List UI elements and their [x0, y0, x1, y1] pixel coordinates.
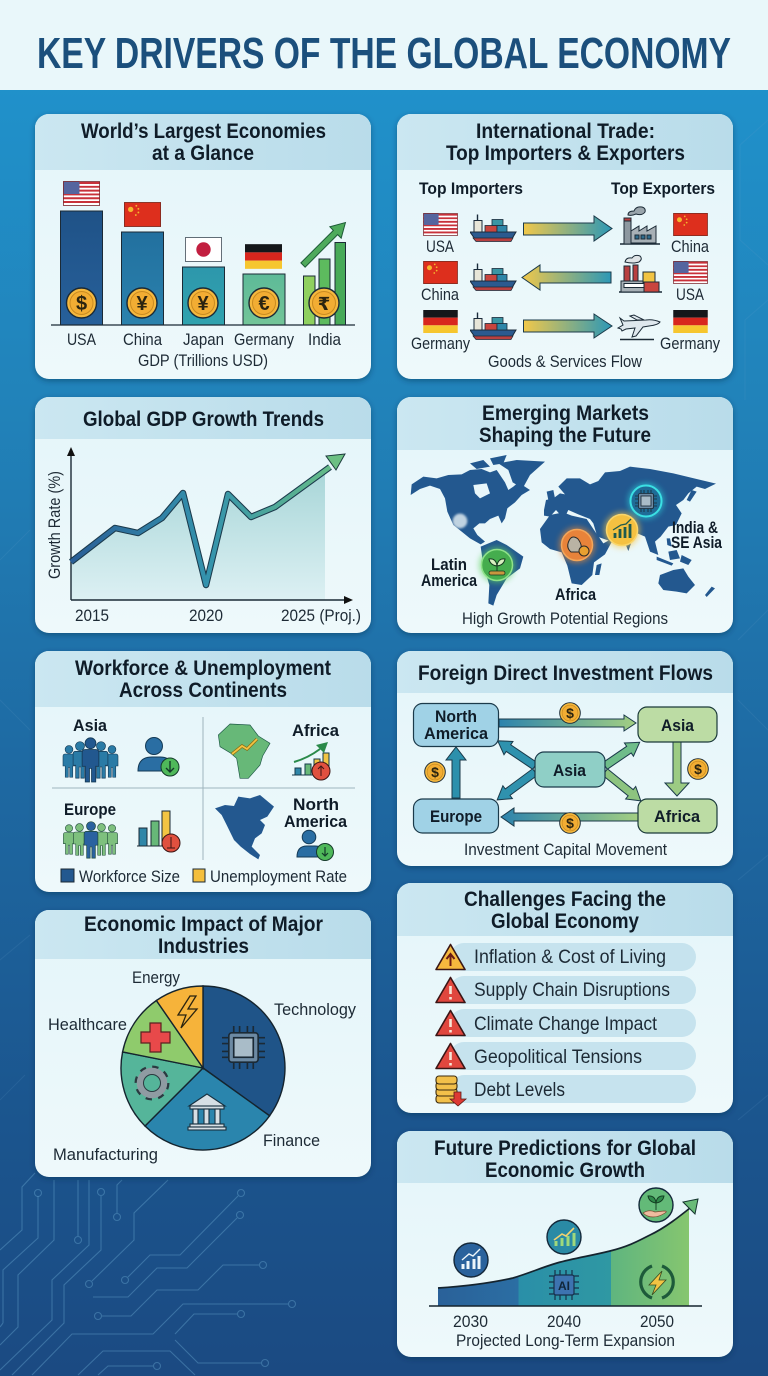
importer flags and labels: USA	[426, 237, 455, 256]
item: inflation: Inflation & Cost of Living	[474, 947, 666, 968]
pie chart	[121, 986, 285, 1150]
node: North America: North	[435, 707, 477, 726]
node: Asia centre: Asia	[553, 761, 586, 780]
heading	[84, 913, 323, 958]
axis labels: 2040	[547, 1312, 581, 1331]
axis labels	[453, 1312, 674, 1331]
icon: gear	[138, 1068, 166, 1098]
flow arrows	[522, 216, 612, 338]
icon: 2040 chart	[547, 1220, 581, 1254]
caption: Investment Capital Movement	[464, 840, 667, 859]
world map	[411, 455, 716, 606]
icon: bank	[188, 1094, 226, 1130]
heading: Global Economy	[491, 910, 639, 933]
region labels: Latin	[431, 555, 467, 574]
heading: at a Glance	[152, 142, 254, 165]
bar chart: GDP by country	[51, 211, 355, 325]
currency coins: $	[76, 293, 87, 315]
heading: Emerging Markets	[482, 402, 649, 425]
heading	[434, 1137, 696, 1182]
region labels: India &	[672, 518, 718, 537]
quadrant: Europe	[63, 800, 180, 858]
dollar coins	[425, 703, 708, 833]
icon: chip	[222, 1026, 265, 1069]
importer flags and labels	[411, 213, 470, 353]
importer flags and labels: China	[421, 285, 459, 304]
panel: world's largest economies	[35, 114, 371, 379]
line chart	[67, 447, 353, 604]
currency coins	[66, 288, 339, 318]
marker: Asia growth	[604, 512, 640, 548]
node: Europe	[414, 799, 498, 833]
country labels: Germany	[234, 330, 294, 349]
sector labels: Energy	[132, 968, 180, 987]
node: Europe: Europe	[430, 807, 482, 826]
heading: Foreign Direct Investment Flows	[418, 662, 713, 685]
node: Asia top: Asia	[661, 716, 694, 735]
currency coins: ¥	[136, 293, 148, 315]
exporter flags and labels: USA	[676, 285, 705, 304]
dollar coins: $	[566, 705, 574, 721]
x-axis labels: 2020	[189, 606, 223, 625]
panel: major industries	[35, 910, 371, 1177]
heading	[81, 120, 326, 165]
quadrant: North America: North	[293, 795, 339, 814]
country labels: China	[123, 330, 162, 349]
heading: Workforce & Unemployment	[75, 657, 331, 680]
exporter flags and labels: China	[671, 237, 709, 256]
node: Asia top	[638, 707, 717, 742]
icon: AI chip	[549, 1270, 579, 1300]
icon: factory	[620, 207, 660, 244]
region labels: SE Asia	[671, 533, 722, 552]
heading	[75, 657, 331, 702]
region labels: Africa	[555, 585, 596, 604]
country labels: Japan	[183, 330, 224, 349]
sector labels: Technology	[274, 1000, 356, 1019]
quadrant: Africa: Africa	[292, 721, 340, 740]
sector labels: Manufacturing	[53, 1145, 158, 1164]
heading: Industries	[158, 935, 249, 958]
x-axis labels: 2025 (Proj.)	[281, 606, 361, 625]
cargo ships	[470, 214, 516, 340]
x-axis labels	[75, 606, 361, 625]
currency coins: ¥	[197, 293, 209, 315]
icon: lightning bolt	[178, 996, 197, 1028]
growth area chart	[429, 1199, 702, 1306]
panel: workforce and unemployment	[35, 651, 371, 892]
node: Africa	[638, 799, 717, 833]
icon: 2050 sustainability	[639, 1188, 673, 1222]
x-axis labels: 2015	[75, 606, 109, 625]
quadrant: Africa	[218, 721, 340, 780]
item: supply chain: Supply Chain Disruptions	[474, 980, 670, 1001]
caption: Projected Long-Term Expansion	[456, 1331, 675, 1350]
axis caption: GDP (Trillions USD)	[138, 351, 268, 370]
heading: Economic Growth	[485, 1159, 645, 1182]
flag: Germany	[245, 244, 282, 269]
quadrant: North America	[215, 795, 347, 860]
importer flags and labels: Germany	[411, 334, 470, 353]
legend	[61, 867, 347, 886]
legend: Workforce Size	[79, 867, 180, 886]
icon: industrial plant	[619, 255, 662, 292]
column heading: importers: Top Importers	[419, 179, 523, 198]
marker: Africa resources	[559, 527, 595, 563]
caption: Goods & Services Flow	[488, 352, 643, 371]
item: climate change	[436, 1009, 696, 1037]
panel: international trade	[397, 114, 733, 379]
icon: medical cross	[141, 1023, 170, 1052]
flag: China	[124, 202, 161, 227]
heading	[479, 402, 651, 447]
icon: renewable energy	[641, 1266, 673, 1298]
sector labels: Finance	[263, 1131, 320, 1150]
panel: challenges	[397, 883, 733, 1113]
title	[0, 0, 768, 90]
country labels	[67, 330, 341, 349]
panel: future predictions	[397, 1131, 733, 1357]
icon: airplane	[618, 315, 660, 340]
sector labels	[48, 968, 356, 1164]
heading: World’s Largest Economies	[81, 120, 326, 143]
country labels: India	[308, 330, 341, 349]
column heading: exporters: Top Exporters	[611, 179, 715, 198]
exporter flags and labels	[660, 213, 720, 353]
country labels: USA	[67, 330, 97, 349]
axis labels: 2030	[453, 1312, 488, 1331]
node: Asia centre	[535, 752, 605, 787]
item: geopolitical tensions	[436, 1042, 696, 1070]
marker: Latin America agriculture	[479, 547, 515, 583]
exporter flags and labels: Germany	[660, 334, 720, 353]
flow arrows	[446, 715, 689, 826]
heading: Global GDP Growth Trends	[83, 408, 324, 431]
dollar coins: $	[694, 761, 702, 777]
quadrant: Asia	[63, 716, 179, 782]
icon: 2030 chart	[454, 1243, 488, 1277]
heading: Challenges Facing the	[464, 888, 666, 911]
axis labels: 2050	[640, 1312, 674, 1331]
item: inflation	[436, 943, 696, 971]
heading	[446, 120, 685, 165]
heading: Across Continents	[119, 679, 287, 702]
item: climate change: Climate Change Impact	[474, 1014, 658, 1035]
caption: High Growth Potential Regions	[462, 609, 668, 628]
heading: Shaping the Future	[479, 424, 651, 447]
sector labels: Healthcare	[48, 1015, 127, 1034]
quadrant: North America: America	[284, 812, 347, 831]
item: debt levels: Debt Levels	[474, 1080, 565, 1101]
item: debt levels	[436, 1075, 696, 1106]
growth arrow: India	[297, 217, 351, 271]
dollar coins: $	[431, 764, 439, 780]
heading: International Trade:	[476, 120, 655, 143]
node: North America	[414, 704, 498, 746]
item: geopolitical tensions: Geopolitical Tensions	[474, 1047, 642, 1068]
currency coins: ₹	[318, 294, 330, 315]
y-axis label: Growth Rate (%)	[45, 471, 64, 579]
flag: Japan	[185, 238, 222, 261]
quadrant: Europe: Europe	[64, 800, 116, 819]
heading: Economic Impact of Major	[84, 913, 323, 936]
panel: global GDP growth trends	[35, 397, 371, 633]
region labels: America	[421, 571, 477, 590]
icon: AI chip: AI	[558, 1279, 570, 1293]
node: North America: America	[424, 724, 489, 743]
flag: USA	[63, 181, 100, 206]
heading: Future Predictions for Global	[434, 1137, 696, 1160]
dollar coins: $	[566, 815, 574, 831]
region labels	[421, 518, 722, 604]
panel: foreign direct investment flows	[397, 651, 733, 866]
legend: Unemployment Rate	[210, 867, 347, 886]
quadrant: Asia: Asia	[73, 716, 108, 735]
node: Africa: Africa	[654, 807, 701, 826]
heading: Top Importers & Exporters	[446, 142, 685, 165]
marker: India and SE Asia technology	[628, 483, 664, 519]
item: supply chain	[436, 976, 696, 1004]
currency coins: €	[258, 293, 270, 315]
panel: emerging markets	[397, 397, 733, 633]
heading	[464, 888, 666, 933]
